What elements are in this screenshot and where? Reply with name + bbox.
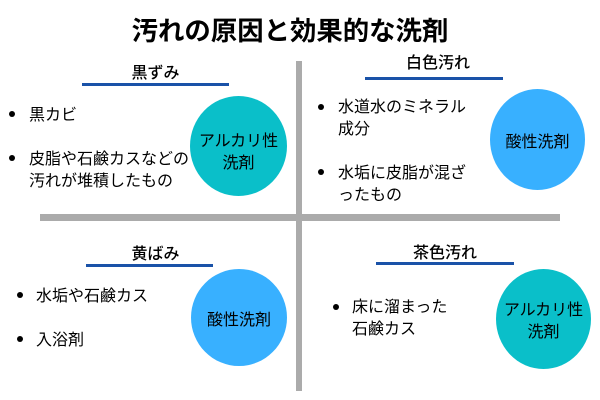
heading: 黄ばみ: 黄ばみ [131, 246, 180, 263]
bullet [333, 304, 339, 310]
text: 水垢 [338, 164, 466, 204]
panel: 白色汚れ [318, 54, 585, 204]
badge: アルカリ性洗剤 [190, 96, 287, 196]
badge text: 洗剤 [527, 324, 560, 341]
text: 床に溜まった [352, 298, 447, 338]
text: 皮脂 [29, 150, 189, 190]
heading: 黒ずみ: 黒ずみ [131, 65, 180, 82]
badge: アルカリ性洗剤 [496, 269, 591, 369]
heading underline [82, 83, 229, 86]
bullet [318, 104, 324, 110]
badge text [504, 301, 583, 341]
bullet [9, 155, 15, 161]
badge text: 酸性洗剤 [207, 312, 271, 329]
panel: 茶色汚れ [333, 244, 591, 369]
text: 水道水 [338, 98, 466, 138]
text: 水道水: 水道水のミネラル [338, 99, 466, 116]
text: 床に溜まった: 石鹸カス [352, 321, 416, 338]
text: 床に溜まった: 床に溜まった [352, 299, 447, 316]
panel: 黄ばみ [17, 245, 287, 366]
text: 皮脂: 皮脂や石鹸カスなどの [29, 151, 189, 168]
vertical axis [296, 61, 302, 391]
horizontal axis [40, 214, 560, 220]
text: 水道水: 成分 [338, 121, 370, 138]
heading underline [86, 264, 213, 266]
heading: 白色汚れ: 白色汚れ [406, 55, 470, 72]
text: 水垢: 水垢に皮脂が混ざ [338, 165, 466, 182]
badge text: 酸性洗剤 [505, 134, 570, 151]
badge: 酸性洗剤 [191, 269, 287, 366]
text: 黒カビ: 黒カビ [29, 107, 77, 124]
heading underline [376, 262, 514, 264]
bullet [9, 111, 15, 117]
heading: 茶色汚れ: 茶色汚れ [413, 245, 477, 262]
bullet [17, 292, 23, 298]
badge text: アルカリ性 [504, 302, 583, 319]
text: 水垢: ったもの [338, 187, 402, 204]
badge: 酸性洗剤 [490, 89, 585, 190]
badge text [199, 132, 278, 172]
badge text: アルカリ性 [199, 133, 278, 150]
heading underline [365, 77, 503, 80]
text: 入浴剤: 入浴剤 [36, 332, 84, 349]
badge text: 洗剤 [222, 155, 254, 172]
panel: 黒ずみ [9, 64, 287, 196]
bullet [318, 169, 324, 175]
title: 汚れの原因と効果的な洗剤 [132, 16, 448, 46]
bullet [17, 336, 23, 342]
text: 皮脂: 汚れが堆積したもの [29, 173, 173, 190]
text: 水垢や石鹸カス: 水垢や石鹸カス [36, 288, 148, 305]
